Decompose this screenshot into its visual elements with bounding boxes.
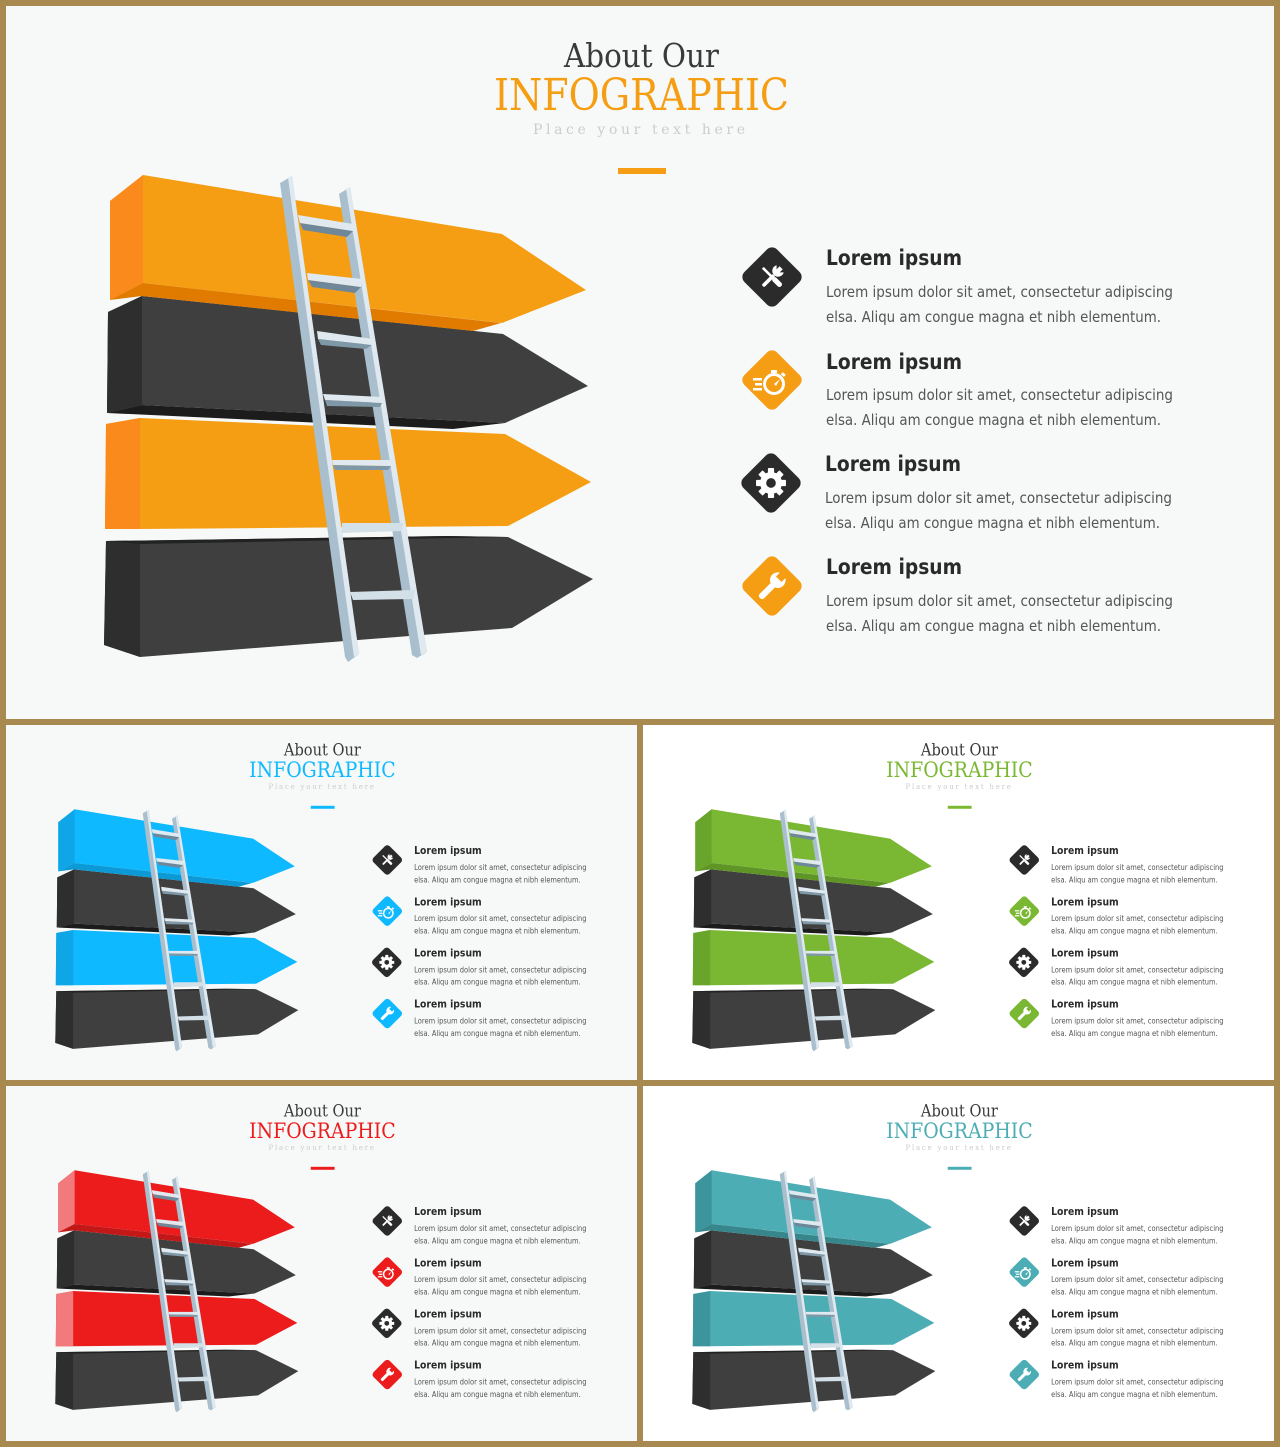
text block 4: Lorem ipsum [826, 555, 962, 579]
title: INFOGRAPHIC [249, 758, 396, 783]
text block 4: Lorem ipsum [1051, 1360, 1119, 1372]
text block 2 [826, 350, 1173, 429]
text block 4: elsa. Aliqu am congue magna et nibh elementum. [1051, 1390, 1218, 1399]
text block 4: Lorem ipsum [414, 999, 482, 1011]
icon: gear [738, 450, 804, 516]
text block 2: Lorem ipsum [1051, 1258, 1119, 1270]
text block 4 [826, 555, 1173, 635]
text block 3: Lorem ipsum [1051, 947, 1119, 959]
text block 2 [1051, 897, 1224, 936]
icon: tools [1008, 844, 1040, 876]
text block 3 [414, 947, 587, 987]
icon: gear [371, 946, 403, 979]
text block 3 [414, 1308, 587, 1348]
text block 3: Lorem ipsum dolor sit amet, consectetur adipiscing [414, 1326, 587, 1335]
text block 2: Lorem ipsum [826, 350, 962, 374]
text block 3 [1051, 1308, 1224, 1348]
chart: stacked arrows with ladder [692, 809, 935, 1051]
title: About Our [283, 1102, 361, 1121]
icon: stopwatch [371, 895, 403, 927]
text block 1: Lorem ipsum dolor sit amet, consectetur adipiscing [1051, 863, 1224, 872]
title [886, 1102, 1033, 1170]
title: INFOGRAPHIC [249, 1119, 396, 1144]
text block 1: elsa. Aliqu am congue magna et nibh elementum. [414, 875, 581, 884]
panel: blue slide [6, 725, 637, 1080]
text block 1 [414, 845, 587, 884]
icon: stopwatch [739, 347, 805, 413]
text block 2: elsa. Aliqu am congue magna et nibh elementum. [826, 411, 1161, 429]
text block 1 [1051, 845, 1224, 884]
icon: wrench [1008, 1358, 1040, 1391]
icon: wrench [739, 553, 805, 619]
icon: wrench [371, 997, 403, 1030]
text block 2: elsa. Aliqu am congue magna et nibh elementum. [1051, 1288, 1218, 1297]
text block 2: Lorem ipsum [414, 897, 482, 909]
text block 3: Lorem ipsum dolor sit amet, consectetur adipiscing [1051, 965, 1224, 974]
text block 4: Lorem ipsum [1051, 999, 1119, 1011]
text block 2: Lorem ipsum [414, 1258, 482, 1270]
chart: stacked arrows with ladder [55, 809, 298, 1051]
text block 4: Lorem ipsum dolor sit amet, consectetur adipiscing [1051, 1377, 1224, 1386]
title: About Our [283, 741, 361, 760]
text block 3: elsa. Aliqu am congue magna et nibh elementum. [414, 978, 581, 987]
text block 3: Lorem ipsum [1051, 1308, 1119, 1320]
text block 3 [825, 452, 1172, 532]
icon: stopwatch [1008, 895, 1040, 927]
text block 2 [1051, 1258, 1224, 1297]
title: Place your text here [269, 783, 374, 791]
title [249, 1102, 396, 1170]
panel: main orange slide [6, 6, 1274, 719]
text block 2: Lorem ipsum dolor sit amet, consectetur adipiscing [414, 1275, 587, 1284]
title: Place your text here [906, 1144, 1011, 1152]
text block 1: Lorem ipsum [414, 1206, 482, 1218]
text block 3: elsa. Aliqu am congue magna et nibh elementum. [1051, 1339, 1218, 1348]
text block 4 [1051, 1360, 1224, 1399]
panel: green slide [643, 725, 1274, 1080]
text block 3: Lorem ipsum dolor sit amet, consectetur adipiscing [1051, 1326, 1224, 1335]
text block 2: Lorem ipsum dolor sit amet, consectetur adipiscing [1051, 914, 1224, 923]
text block 4 [414, 1360, 587, 1399]
text block 1: Lorem ipsum [1051, 1206, 1119, 1218]
title: Place your text here [533, 122, 745, 138]
text block 4: Lorem ipsum dolor sit amet, consectetur adipiscing [414, 1016, 587, 1025]
text block 1 [414, 1206, 587, 1245]
text block 1: elsa. Aliqu am congue magna et nibh elementum. [1051, 875, 1218, 884]
text block 1: elsa. Aliqu am congue magna et nibh elementum. [1051, 1236, 1218, 1245]
icon: tools [739, 244, 805, 310]
icon: gear [1008, 1307, 1040, 1340]
text block 4: Lorem ipsum dolor sit amet, consectetur adipiscing [1051, 1016, 1224, 1025]
icon: wrench [1008, 997, 1040, 1030]
icon: stopwatch [371, 1256, 403, 1288]
text block 4: Lorem ipsum dolor sit amet, consectetur adipiscing [414, 1377, 587, 1386]
text block 3: Lorem ipsum [414, 1308, 482, 1320]
text block 4: elsa. Aliqu am congue magna et nibh elementum. [414, 1390, 581, 1399]
text block 1: Lorem ipsum dolor sit amet, consectetur adipiscing [414, 1224, 587, 1233]
text block 2: Lorem ipsum dolor sit amet, consectetur adipiscing [414, 914, 587, 923]
icon: wrench [371, 1358, 403, 1391]
text block 2: elsa. Aliqu am congue magna et nibh elementum. [1051, 927, 1218, 936]
text block 1 [826, 246, 1173, 326]
text block 3: elsa. Aliqu am congue magna et nibh elementum. [1051, 978, 1218, 987]
text block 1: Lorem ipsum dolor sit amet, consectetur adipiscing [826, 283, 1173, 301]
text block 3: Lorem ipsum [825, 452, 961, 476]
text block 3: elsa. Aliqu am congue magna et nibh elementum. [825, 514, 1160, 532]
title: About Our [920, 741, 998, 760]
text block 4: elsa. Aliqu am congue magna et nibh elementum. [414, 1029, 581, 1038]
text block 3: Lorem ipsum dolor sit amet, consectetur adipiscing [414, 965, 587, 974]
title: About Our [920, 1102, 998, 1121]
text block 3 [1051, 947, 1224, 987]
icon: gear [371, 1307, 403, 1340]
text block 4 [414, 999, 587, 1038]
text block 1: elsa. Aliqu am congue magna et nibh elementum. [414, 1236, 581, 1245]
title [886, 741, 1033, 809]
text block 1: Lorem ipsum [414, 845, 482, 857]
text block 2 [414, 897, 587, 936]
title: INFOGRAPHIC [886, 758, 1033, 783]
text block 3: Lorem ipsum dolor sit amet, consectetur adipiscing [825, 489, 1172, 507]
title: Place your text here [906, 783, 1011, 791]
text block 2: elsa. Aliqu am congue magna et nibh elementum. [414, 1288, 581, 1297]
text block 1: Lorem ipsum dolor sit amet, consectetur adipiscing [414, 863, 587, 872]
text block 2: Lorem ipsum [1051, 897, 1119, 909]
icon: gear [1008, 946, 1040, 979]
chart: stacked arrows with ladder [104, 175, 593, 662]
text block 4: elsa. Aliqu am congue magna et nibh elementum. [826, 617, 1161, 635]
text block 2 [414, 1258, 587, 1297]
text block 2: Lorem ipsum dolor sit amet, consectetur adipiscing [826, 386, 1173, 404]
title: INFOGRAPHIC [886, 1119, 1033, 1144]
text block 1: Lorem ipsum dolor sit amet, consectetur adipiscing [1051, 1224, 1224, 1233]
icon: tools [371, 844, 403, 876]
text block 1 [1051, 1206, 1224, 1245]
text block 3: Lorem ipsum [414, 947, 482, 959]
chart: stacked arrows with ladder [692, 1170, 935, 1412]
title: Place your text here [269, 1144, 374, 1152]
chart: stacked arrows with ladder [55, 1170, 298, 1412]
text block 4: elsa. Aliqu am congue magna et nibh elementum. [1051, 1029, 1218, 1038]
icon: stopwatch [1008, 1256, 1040, 1288]
text block 3: elsa. Aliqu am congue magna et nibh elementum. [414, 1339, 581, 1348]
title: About Our [563, 36, 719, 75]
title: INFOGRAPHIC [494, 70, 789, 121]
text block 4: Lorem ipsum [414, 1360, 482, 1372]
text block 1: elsa. Aliqu am congue magna et nibh elementum. [826, 308, 1161, 326]
text block 1: Lorem ipsum [1051, 845, 1119, 857]
icon: tools [371, 1205, 403, 1237]
text block 2: Lorem ipsum dolor sit amet, consectetur adipiscing [1051, 1275, 1224, 1284]
icon: tools [1008, 1205, 1040, 1237]
title [494, 36, 789, 174]
text block 2: elsa. Aliqu am congue magna et nibh elementum. [414, 927, 581, 936]
panel: teal slide [643, 1086, 1274, 1441]
text block 4: Lorem ipsum dolor sit amet, consectetur adipiscing [826, 592, 1173, 610]
panel: red slide [6, 1086, 637, 1441]
text block 1: Lorem ipsum [826, 246, 962, 270]
text block 4 [1051, 999, 1224, 1038]
title [249, 741, 396, 809]
